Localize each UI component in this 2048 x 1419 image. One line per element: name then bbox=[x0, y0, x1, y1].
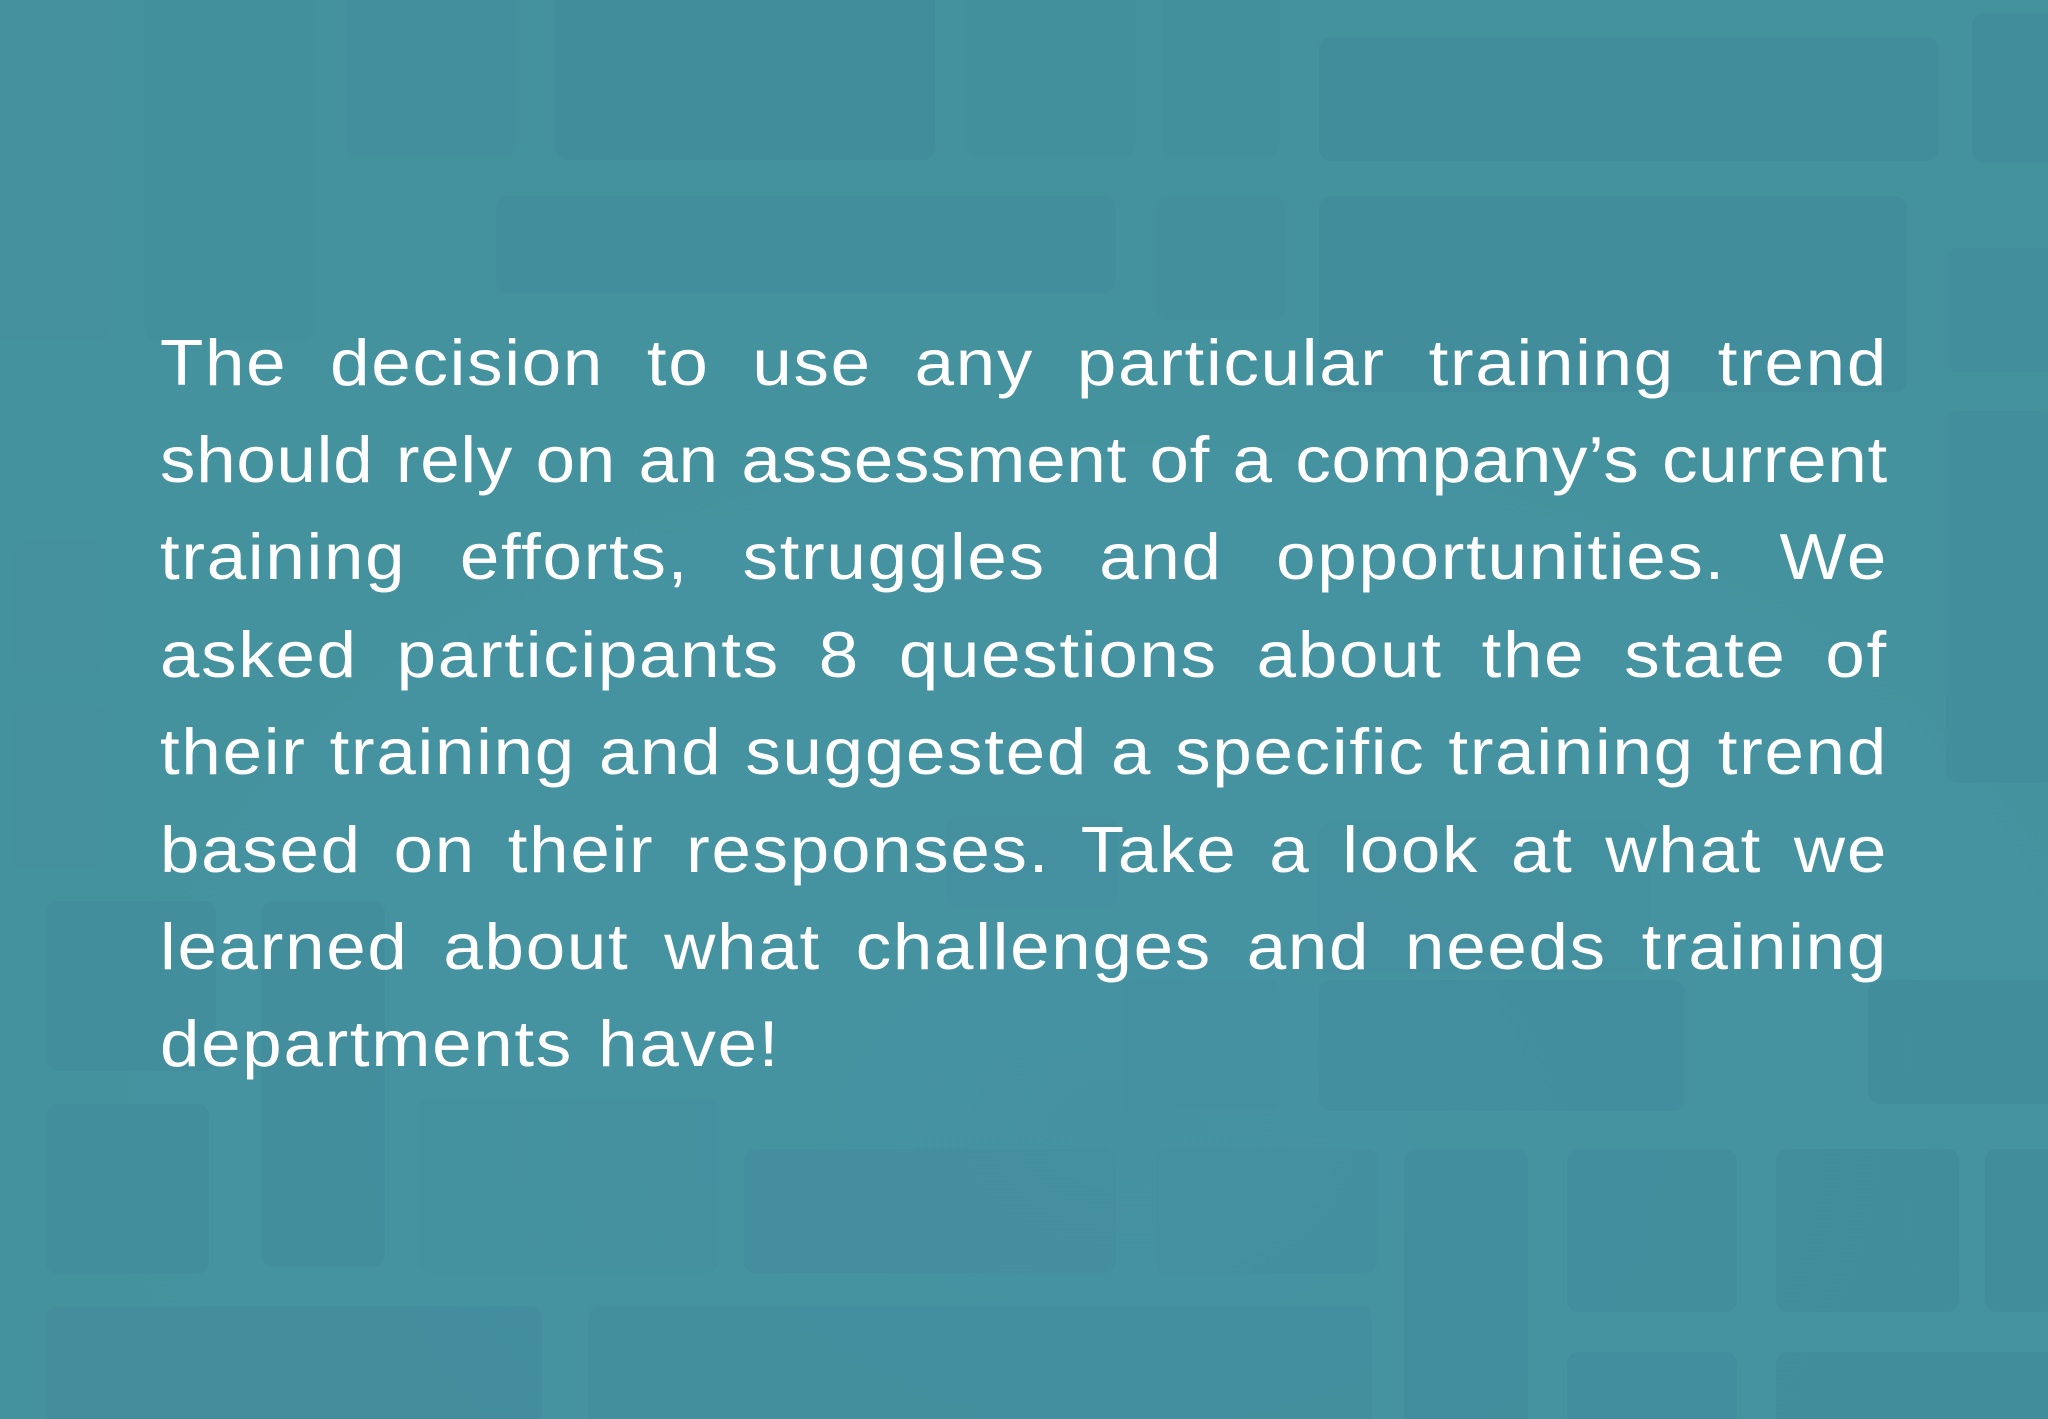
text block: introduction paragraph: The decision to use any particular training trend bbox=[160, 326, 1888, 398]
text block: introduction paragraph: training efforts, struggles and opportunities. We bbox=[160, 520, 1888, 593]
text block: introduction paragraph: should rely on an assessment of a company’s current bbox=[160, 423, 1888, 496]
text block: introduction paragraph: learned about what challenges and needs training bbox=[160, 910, 1888, 983]
text block: introduction paragraph bbox=[160, 326, 1888, 1080]
text block: introduction paragraph: asked participants 8 questions about the state of bbox=[160, 618, 1888, 691]
text block: introduction paragraph: based on their responses. Take a look at what we bbox=[160, 812, 1888, 886]
text block: introduction paragraph: their training and suggested a specific training trend bbox=[160, 715, 1888, 788]
text block: introduction paragraph: departments have! bbox=[160, 1007, 780, 1080]
